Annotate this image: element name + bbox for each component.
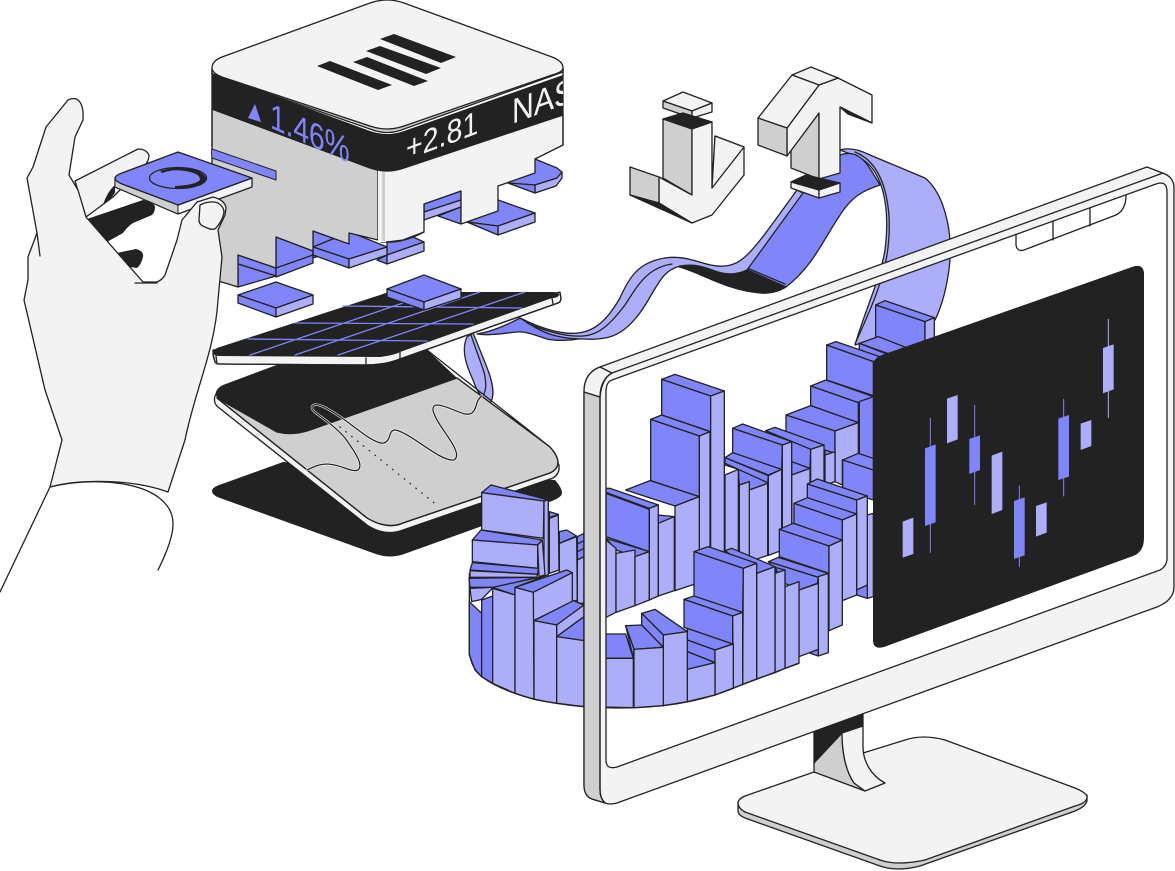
top face <box>212 0 563 129</box>
back finger <box>75 149 149 217</box>
monitor frame <box>584 167 1174 804</box>
purple tiles below cube <box>238 159 562 287</box>
left ring bars <box>469 485 584 707</box>
cuff and sleeve <box>0 482 173 592</box>
monitor stand and base <box>738 714 1087 869</box>
front centre bars <box>584 547 757 708</box>
ribbon underside <box>679 266 786 293</box>
back left bars <box>606 374 724 617</box>
monitor inner lines <box>600 173 1163 803</box>
left face <box>212 109 378 287</box>
large ribbon <box>520 149 950 345</box>
slit <box>212 149 276 180</box>
monitor side face <box>584 392 605 803</box>
logo bars <box>317 34 456 90</box>
corner highlight <box>378 170 386 242</box>
dotted line <box>340 427 438 506</box>
loading ring <box>150 168 206 188</box>
right face <box>378 115 563 242</box>
down arrow <box>630 92 744 223</box>
back right bars <box>786 301 934 598</box>
back centre bars <box>725 424 835 571</box>
tablet with wave curve <box>214 350 559 533</box>
ticker percent <box>248 104 261 122</box>
hand and thumb <box>24 98 226 492</box>
card <box>115 178 252 214</box>
candlestick chart panel <box>873 266 1144 648</box>
finger shadows <box>87 185 155 268</box>
black shadow under tablet <box>212 462 562 556</box>
ribbon underside beneath the panel <box>477 318 583 340</box>
monitor notch <box>1016 195 1126 250</box>
candles <box>903 319 1114 567</box>
ring base outline <box>469 573 798 708</box>
ticker change: +2.81 <box>406 103 478 167</box>
thumbnail <box>199 202 224 229</box>
data cube with ticker <box>212 0 574 287</box>
up arrow <box>758 67 872 198</box>
data cube with ticker: 1.46% <box>270 96 350 172</box>
tile on panel <box>387 275 461 310</box>
loose tile under cube <box>238 282 313 317</box>
ribbon inner panel <box>743 153 880 287</box>
ticker symbol: NAS <box>512 71 574 132</box>
wave line <box>307 396 482 471</box>
front right bars <box>725 479 867 679</box>
ribbon linking panel to tablet <box>464 333 493 403</box>
ribbon wave <box>520 190 803 339</box>
black grid panel <box>213 292 561 365</box>
3D bar chart ring <box>469 301 934 708</box>
hand holding card <box>0 98 252 592</box>
band sides <box>212 68 563 132</box>
